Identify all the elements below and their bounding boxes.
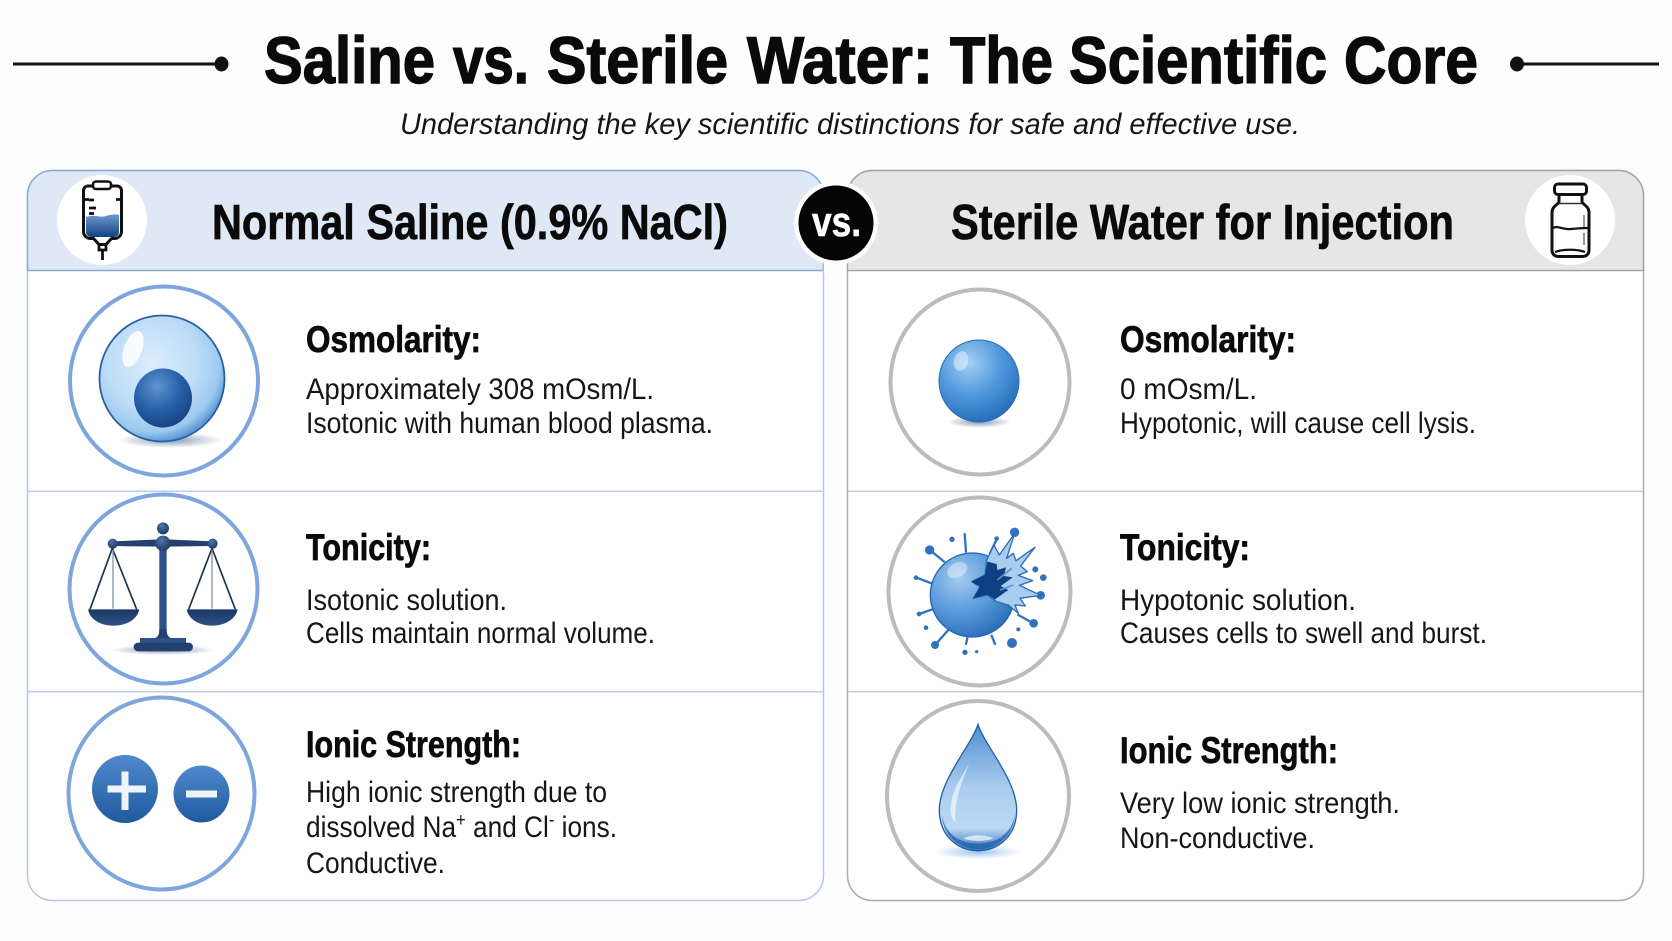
icon: isotonic cell — [70, 286, 258, 476]
title decoration: right line with dot — [1510, 56, 1659, 72]
text: ionic sterile body — [1120, 787, 1400, 855]
title — [264, 23, 1478, 97]
text: ionic saline body: + — [456, 810, 466, 831]
row: tonicity saline — [70, 494, 655, 684]
panel: sterile water — [848, 170, 1644, 900]
text: tonicity saline body — [306, 584, 655, 650]
subtitle: Understanding the key scientific distinctions for safe and effective use. — [400, 108, 1300, 141]
text: ionic saline body: - — [549, 810, 554, 831]
icon: vial — [1525, 175, 1615, 265]
title: Water: — [747, 23, 933, 97]
vs badge — [794, 181, 878, 274]
panel header: sterile water — [848, 170, 1644, 270]
panel frame: sterile water body — [848, 170, 1644, 900]
row divider: sterile 1 — [848, 490, 1643, 492]
title: vs. — [453, 23, 529, 97]
text: osmolarity sterile body: Hypotonic, will cause cell lysis. — [1120, 407, 1476, 440]
text: ionic saline heading: Ionic Strength: — [306, 724, 521, 765]
icon: small sphere — [890, 290, 1070, 474]
panel header: saline — [28, 170, 824, 270]
panel frame: saline body — [28, 170, 824, 900]
row divider: sterile 2 — [848, 691, 1643, 692]
title: Sterile — [547, 23, 728, 97]
row divider: saline 2 — [28, 691, 823, 692]
heading: sterile water: Sterile Water for Injection — [951, 195, 1454, 250]
row: ionic strength sterile — [887, 701, 1400, 891]
icon: plus and minus ions — [68, 698, 254, 890]
text: ionic saline body: Conductive. — [306, 847, 445, 880]
title decoration: left line with dot — [13, 56, 228, 72]
text: ionic saline body: High ionic strength due to — [306, 776, 607, 809]
heading: normal saline: Normal Saline (0.9% NaCl) — [212, 195, 728, 250]
title: Scientific — [1069, 23, 1327, 97]
icon: bursting cell — [888, 498, 1070, 686]
text: ionic saline body — [306, 776, 617, 880]
vs badge: vs. — [812, 198, 861, 245]
title: Core — [1344, 23, 1478, 97]
text: osmolarity saline heading: Osmolarity: — [306, 319, 481, 360]
row: ionic strength saline — [68, 698, 617, 890]
icon: IV bag — [57, 175, 147, 265]
text: tonicity saline heading: Tonicity: — [306, 527, 431, 568]
text: osmolarity sterile body — [1120, 373, 1476, 440]
text: tonicity sterile body — [1120, 584, 1487, 650]
text: osmolarity saline body — [306, 373, 713, 440]
text: ionic saline body: ions. — [554, 811, 617, 844]
text: ionic sterile heading: Ionic Strength: — [1120, 730, 1338, 771]
text: tonicity sterile body: Hypotonic solution. — [1120, 584, 1356, 617]
text: tonicity sterile heading: Tonicity: — [1120, 527, 1250, 568]
row divider: saline 1 — [28, 490, 823, 492]
icon: balance scale — [70, 494, 258, 684]
text: osmolarity saline body: Approximately 308 mOsm/L. — [306, 373, 654, 406]
panel: normal saline — [28, 170, 824, 900]
title: Saline — [264, 23, 435, 97]
text: ionic sterile body: Non-conductive. — [1120, 822, 1315, 855]
text: osmolarity saline body: Isotonic with human blood plasma. — [306, 407, 713, 440]
icon: water drop — [887, 701, 1069, 891]
text: ionic sterile body: Very low ionic strength. — [1120, 787, 1400, 820]
text: tonicity saline body: Cells maintain normal volume. — [306, 617, 655, 650]
text: ionic saline body: dissolved Na — [306, 811, 478, 844]
text: osmolarity sterile heading: Osmolarity: — [1120, 319, 1296, 360]
row: osmolarity saline — [70, 286, 713, 476]
row: osmolarity sterile — [890, 290, 1476, 474]
row: tonicity sterile — [888, 498, 1487, 686]
text: ionic saline body: and Cl — [466, 811, 549, 844]
text: tonicity saline body: Isotonic solution. — [306, 584, 507, 617]
text: osmolarity sterile body: 0 mOsm/L. — [1120, 373, 1257, 406]
text: tonicity sterile body: Causes cells to swell and burst. — [1120, 617, 1487, 650]
title: The — [950, 23, 1053, 97]
